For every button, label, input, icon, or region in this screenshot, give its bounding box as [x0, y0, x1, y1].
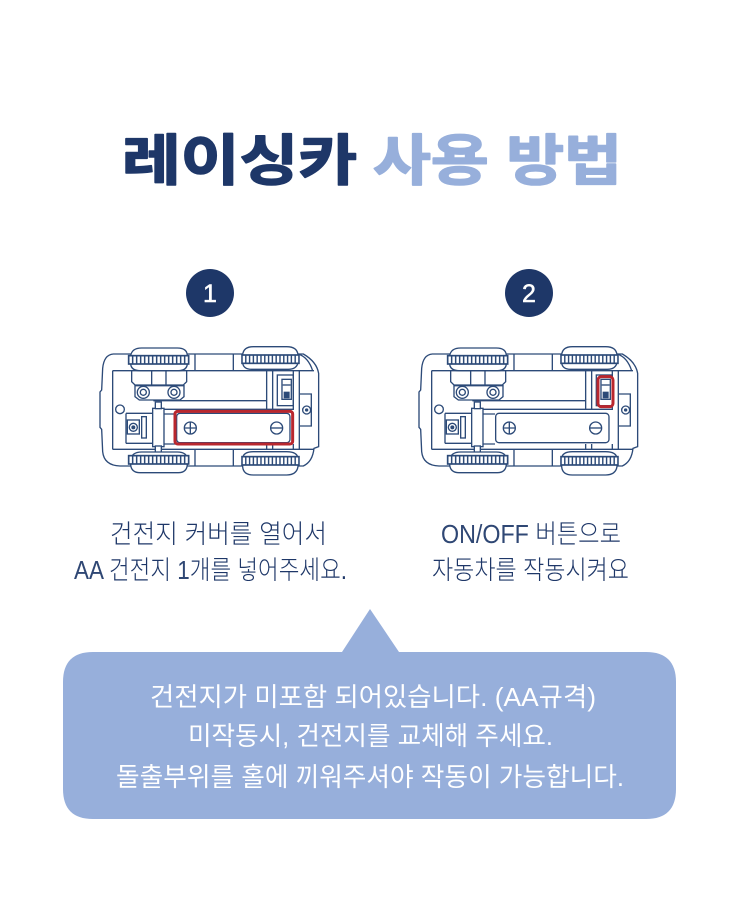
illustration: car underside with battery cover highlighted — [100, 347, 319, 475]
callout: notes speech bubble: 건전지가 미포함 되어있습니다. (AA규격) — [150, 682, 596, 712]
step 2 number badge — [505, 269, 553, 317]
title: 사용 방법 — [373, 130, 622, 192]
title — [122, 130, 622, 192]
callout: notes speech bubble: 돌출부위를 홀에 끼워주셔야 작동이 가능합니다. — [116, 762, 624, 792]
step 1 caption — [74, 519, 347, 585]
step 1 number badge — [186, 269, 234, 317]
highlight: battery cover — [175, 411, 293, 444]
step 2 caption — [432, 519, 629, 585]
step 1 caption: AA 건전지 1개를 넣어주세요. — [74, 555, 347, 585]
step 2 number badge: 2 — [522, 280, 536, 308]
step 1 number badge: 1 — [203, 280, 217, 308]
callout: notes speech bubble: 미작동시, 건전지를 교체해 주세요. — [188, 721, 553, 751]
illustration: car underside with power switch highlighted — [419, 347, 638, 475]
step 2 caption: ON/OFF 버튼으로 — [441, 519, 621, 549]
highlight: power switch — [598, 377, 613, 407]
step 2 caption: 자동차를 작동시켜요 — [432, 555, 629, 585]
step 1 caption: 건전지 커버를 열어서 — [110, 519, 327, 549]
callout: notes speech bubble — [63, 609, 676, 819]
title: 레이싱카 — [122, 130, 357, 192]
